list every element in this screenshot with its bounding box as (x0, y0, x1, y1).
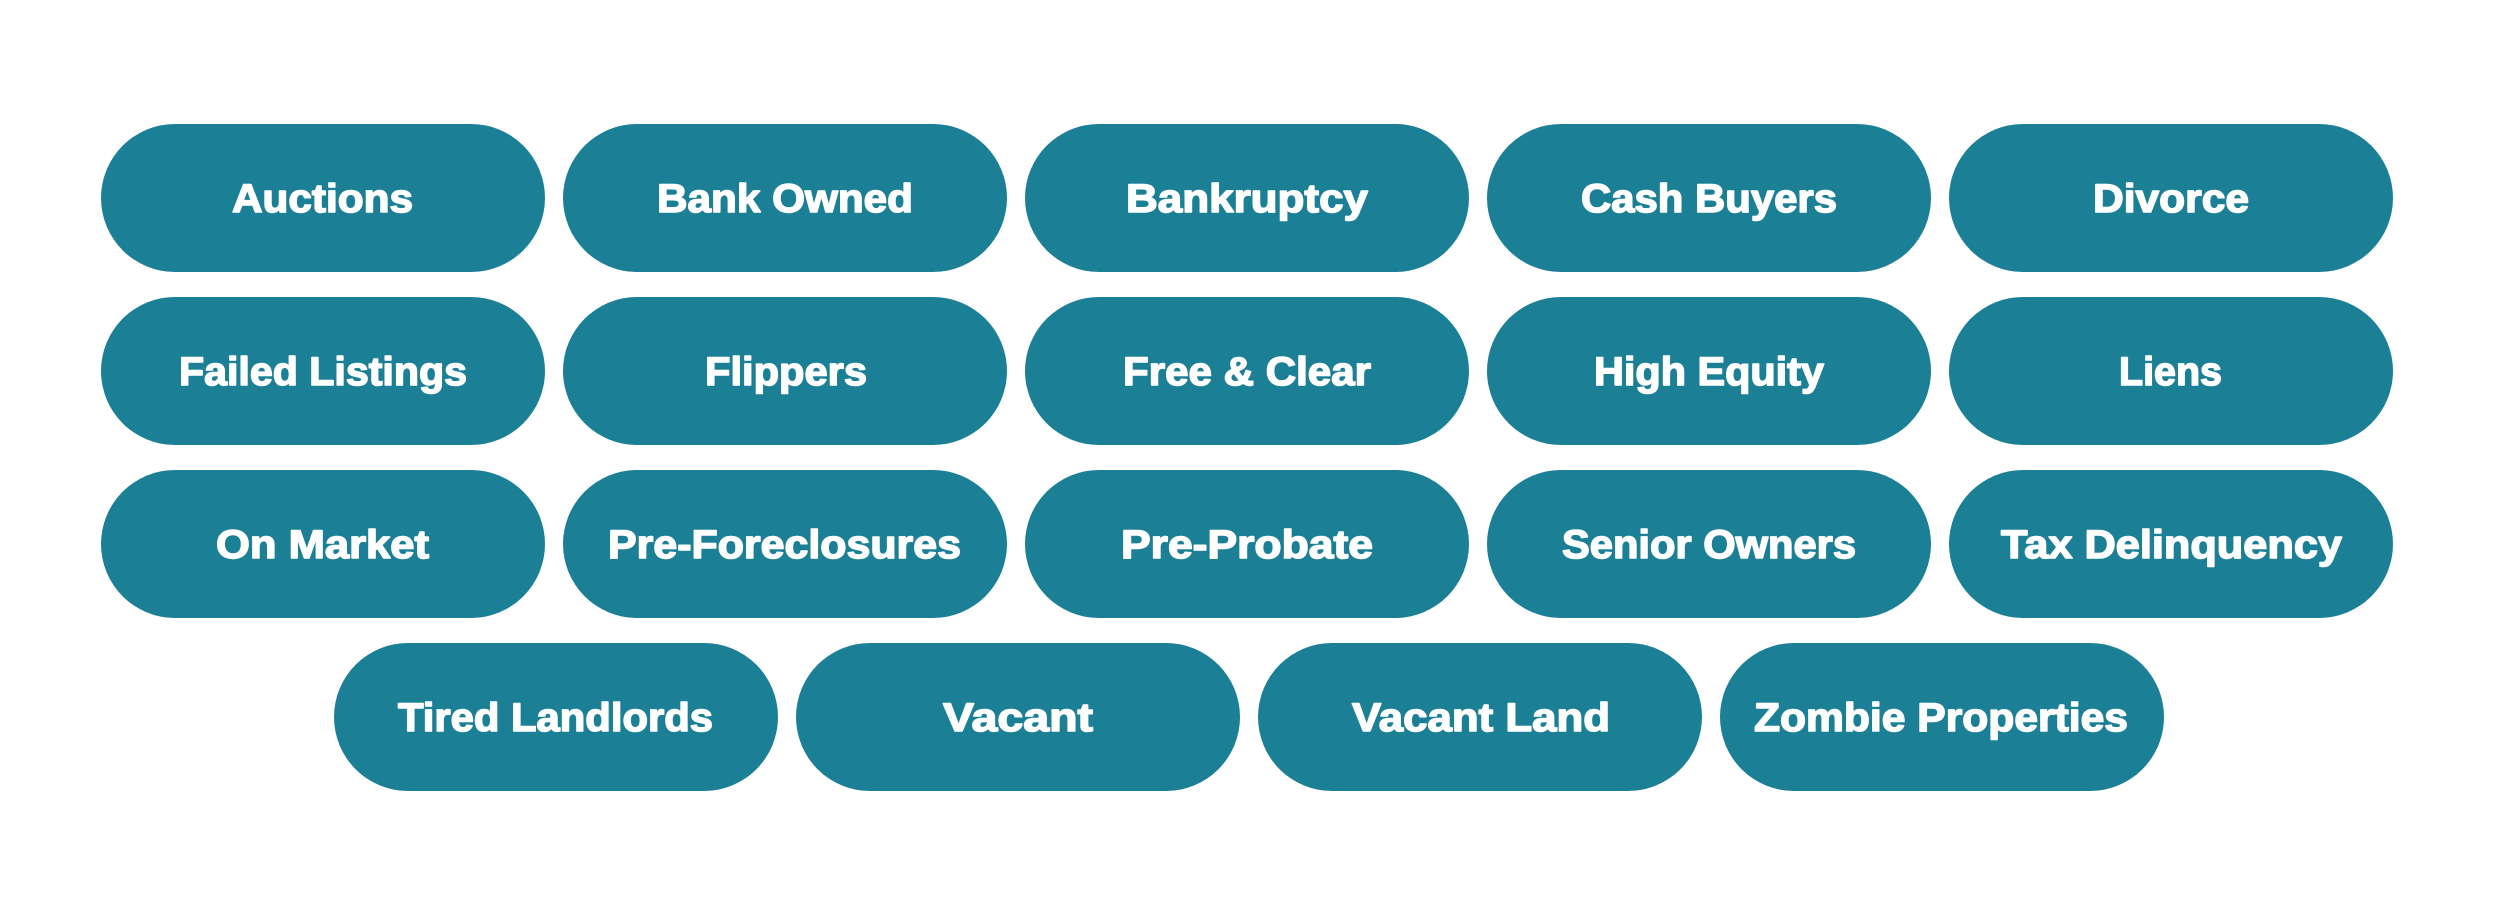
pill: Cash Buyers (1487, 124, 1931, 272)
pill: Tired Landlords (334, 643, 778, 791)
pill: Vacant: Vacant (943, 696, 1093, 740)
pill: Senior Owners (1487, 470, 1931, 618)
pill: Zombie Properties: Zombie Properties (1754, 696, 2128, 740)
pill: Flippers: Flippers (705, 350, 867, 394)
pill: Senior Owners: Senior Owners (1562, 523, 1856, 567)
pill: Free & Clear: Free & Clear (1123, 350, 1371, 394)
pill: On Market: On Market (216, 523, 429, 567)
pill: Divorce (1949, 124, 2393, 272)
pill: Zombie Properties (1720, 643, 2164, 791)
pill: Tired Landlords: Tired Landlords (398, 696, 713, 740)
pill: On Market (101, 470, 545, 618)
pill: Bankruptcy: Bankruptcy (1126, 177, 1369, 221)
pill: Liens: Liens (2119, 350, 2222, 394)
pill: Bank Owned (563, 124, 1007, 272)
pill: High Equity (1487, 297, 1931, 445)
pill: Pre-Foreclosures: Pre-Foreclosures (608, 523, 961, 567)
pill: Liens (1949, 297, 2393, 445)
pill: Pre-Probate: Pre-Probate (1121, 523, 1373, 567)
pill: Auctions: Auctions (232, 177, 413, 221)
pill: Free & Clear (1025, 297, 1469, 445)
pill: Tax Delinquency (1949, 470, 2393, 618)
pill: Bankruptcy (1025, 124, 1469, 272)
pill: Bank Owned: Bank Owned (657, 177, 913, 221)
pill: Failed Listings (101, 297, 545, 445)
pill: Pre-Probate (1025, 470, 1469, 618)
pill: Vacant (796, 643, 1240, 791)
pill: Vacant Land (1258, 643, 1702, 791)
pill: Divorce: Divorce (2093, 177, 2249, 221)
pill: High Equity: High Equity (1594, 350, 1825, 394)
pill: Cash Buyers: Cash Buyers (1581, 177, 1837, 221)
pill: Vacant Land: Vacant Land (1352, 696, 1610, 740)
pill: Pre-Foreclosures (563, 470, 1007, 618)
pill: Flippers (563, 297, 1007, 445)
pill: Failed Listings: Failed Listings (179, 350, 467, 394)
pill: Tax Delinquency: Tax Delinquency (2001, 523, 2343, 567)
pill: Auctions (101, 124, 545, 272)
